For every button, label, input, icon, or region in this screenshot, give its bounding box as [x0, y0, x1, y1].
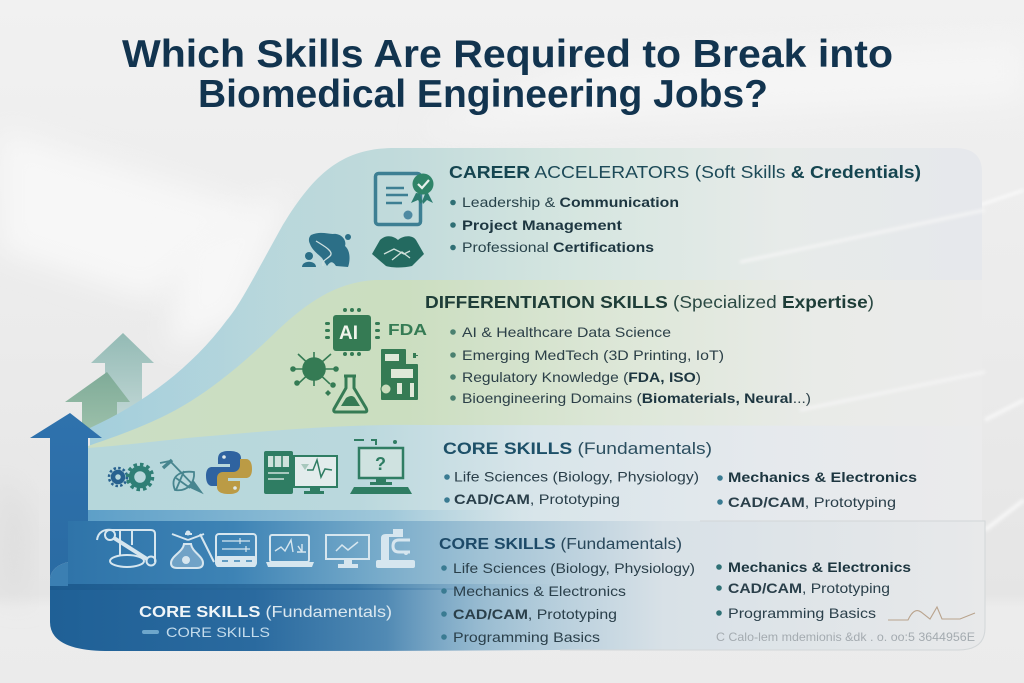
- core skills lower bullets, right column: CAD/CAM , Prototyping: [728, 580, 890, 596]
- differentiation bullets: Regulatory Knowledge ( FDA, ISO ): [462, 369, 701, 385]
- title: Biomedical Engineering Jobs?: [198, 73, 768, 116]
- heading: differentiation skills: DIFFERENTIATION SKILLS (Specialized Expertise ): [425, 292, 874, 312]
- icon: flask: [325, 376, 367, 412]
- core skills lower bullets, left column: Programming Basics: [453, 629, 600, 645]
- core skills upper bullets: Life Sciences (Biology, Physiology): [454, 468, 699, 484]
- core skills lower bullets, left column: Life Sciences (Biology, Physiology): [453, 560, 695, 576]
- core skills lower bullets, right column: Mechanics & Electronics: [728, 559, 911, 575]
- icon: control panel: [216, 534, 256, 567]
- heading: base label: CORE SKILLS (Fundamentals): [139, 604, 392, 621]
- core skills lower bullets, left column: [441, 560, 695, 645]
- differentiation bullets: [450, 324, 811, 406]
- icon: laptop chart: [266, 535, 314, 567]
- career bullets: Leadership & Communication: [462, 194, 679, 210]
- footnote text: C Calo-lem mdemionis &dk . o. oo:5 3644956E: [716, 630, 975, 644]
- arrow: blue, front: [30, 413, 102, 578]
- arrow: green, middle: [65, 372, 130, 432]
- core skills upper bullets: CAD/CAM , Prototyping: [454, 491, 620, 507]
- base sublabel: CORE SKILLS: [166, 624, 270, 640]
- core skills lower bullets, right column: Programming Basics: [728, 605, 876, 621]
- arrow: light green, back: [91, 333, 154, 425]
- panel: differentiation skills: [88, 280, 982, 452]
- differentiation bullets: AI & Healthcare Data Science: [462, 324, 671, 340]
- icon: terminal with question mark: [350, 440, 412, 494]
- core skills lower bullets, left column: CAD/CAM , Prototyping: [453, 606, 617, 622]
- title: [122, 33, 893, 116]
- small waveform sketch: [888, 607, 975, 620]
- core skills upper bullets: [444, 468, 917, 510]
- icon: certificate with badge: [376, 174, 434, 224]
- icon: computer with ECG: [264, 451, 337, 494]
- icon: satellite dish: [160, 460, 201, 492]
- core skills upper bullets: CAD/CAM , Prototyping: [728, 494, 896, 510]
- icon: robotic arm: [97, 530, 156, 567]
- icon: monitor trend: [326, 535, 369, 568]
- icon: AI chip: [325, 308, 380, 356]
- heading: core skills upper: CORE SKILLS (Fundamentals): [443, 440, 712, 458]
- icon: python logo: [206, 451, 252, 494]
- icon: virus: [291, 352, 338, 387]
- career bullets: Professional Certifications: [462, 239, 654, 255]
- icon: flask with molecules: [171, 532, 214, 568]
- icon: magnet device: [376, 529, 415, 568]
- icon: people and brain: [302, 233, 351, 267]
- differentiation bullets: Emerging MedTech (3D Printing, IoT): [462, 347, 724, 363]
- panel right edge outline, and sheet highlights over panels: [560, 210, 985, 650]
- icon: gears: [109, 464, 152, 490]
- core skills lower bullets, left column: Mechanics & Electronics: [453, 583, 626, 599]
- heading: career accelerators: CAREER ACCELERATORS (Soft Skills & Credentials): [449, 162, 921, 182]
- panel: core skills, upper tier: [88, 425, 982, 521]
- career bullets: Project Management: [462, 217, 622, 233]
- icon: FDA mark: FDA: [388, 322, 428, 339]
- panel: career accelerators: [90, 148, 982, 450]
- icon: terminal with question mark: ?: [375, 454, 386, 474]
- icon: handshake: [372, 236, 424, 268]
- title: Which Skills Are Required to Break into: [122, 33, 893, 76]
- core skills lower bullets, right column: [716, 559, 911, 621]
- icon: lab machine: [381, 349, 418, 400]
- panel: core skills, lower tier background: [68, 521, 985, 650]
- differentiation bullets: Bioengineering Domains ( Biomaterials, Neural ...): [462, 390, 811, 406]
- career bullets: [450, 194, 679, 255]
- core skills upper bullets: Mechanics & Electronics: [728, 469, 917, 485]
- panel: base slab: [50, 562, 560, 651]
- icon: AI chip: AI: [339, 323, 358, 344]
- core skills lower tier content: [97, 529, 975, 645]
- heading: core skills lower: CORE SKILLS (Fundamentals): [439, 536, 682, 553]
